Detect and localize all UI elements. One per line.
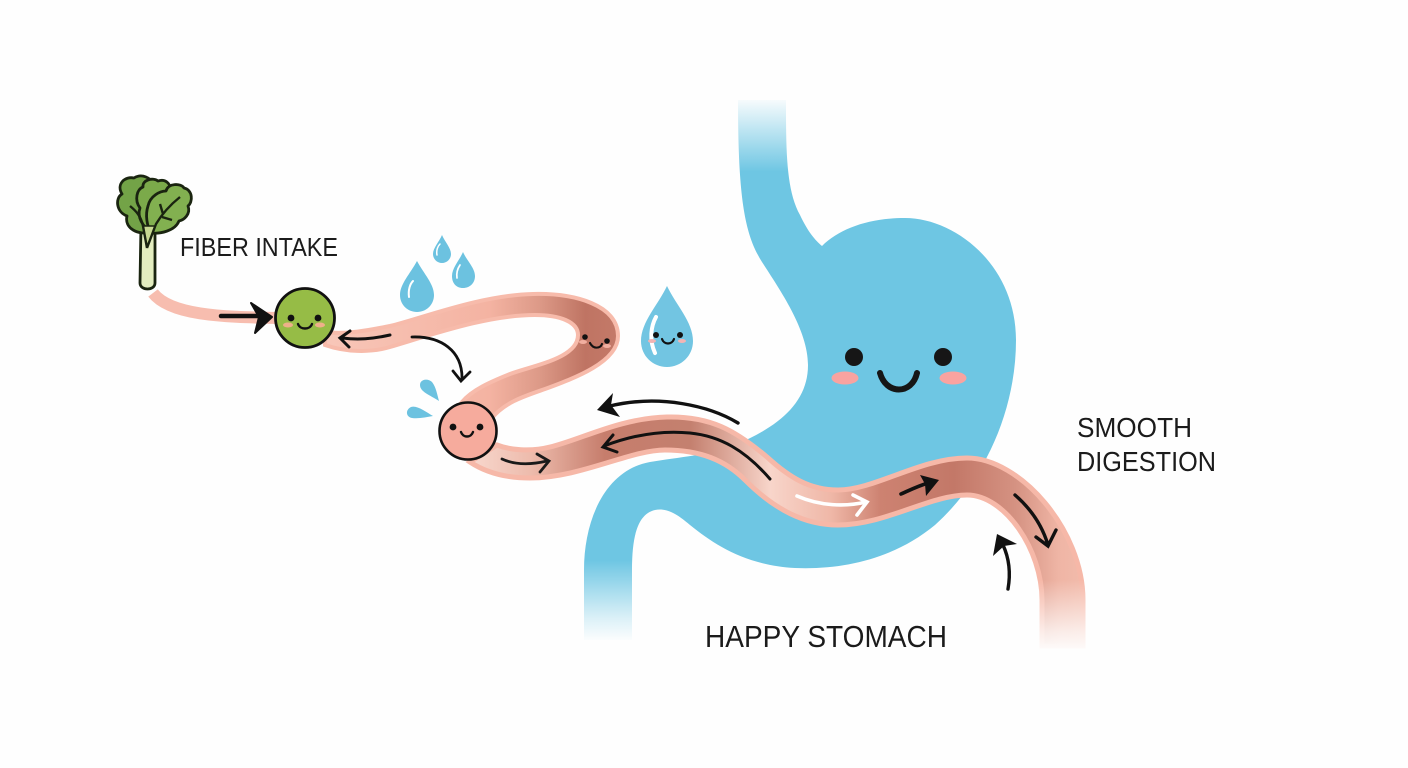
arrow: large curved arrow leftward — [597, 393, 738, 423]
arrow: up outside intestine — [993, 534, 1017, 589]
icon: leafy green — [118, 176, 191, 289]
water drop character — [641, 286, 693, 367]
water drop: left — [400, 261, 434, 312]
splash droplets — [407, 380, 439, 418]
water drop: right — [452, 252, 475, 288]
water drops group — [400, 235, 475, 312]
label: smooth digestion: SMOOTH — [1077, 412, 1192, 443]
arrow: out of pink circle — [502, 454, 549, 472]
fiber tail tube — [153, 293, 278, 318]
label: smooth digestion: DIGESTION — [1077, 446, 1216, 477]
stomach face — [832, 348, 966, 390]
stomach — [578, 96, 1016, 642]
arrow: curve down right — [1015, 495, 1056, 546]
label: happy stomach: HAPPY STOMACH — [705, 619, 947, 654]
label: smooth digestion — [1077, 412, 1216, 477]
water drop: top — [433, 235, 451, 263]
stomach body with esophagus and lower duct — [584, 100, 1016, 640]
arrow: fiber into green circle — [221, 303, 272, 333]
pink circle character — [440, 402, 496, 460]
arrow: white inside intestine — [797, 495, 867, 515]
intestine upper segment — [325, 294, 618, 418]
label: fiber intake: FIBER INTAKE — [180, 232, 338, 262]
intestine lower segment — [470, 417, 1092, 654]
arrow: inside intestine leftward — [603, 432, 770, 479]
arrow: curved down to pink circle — [412, 337, 470, 381]
intestine face — [579, 334, 611, 348]
green circle character — [276, 288, 334, 348]
arrow: black short inside intestine — [901, 475, 939, 496]
arrow: into green circle from right — [340, 331, 390, 347]
